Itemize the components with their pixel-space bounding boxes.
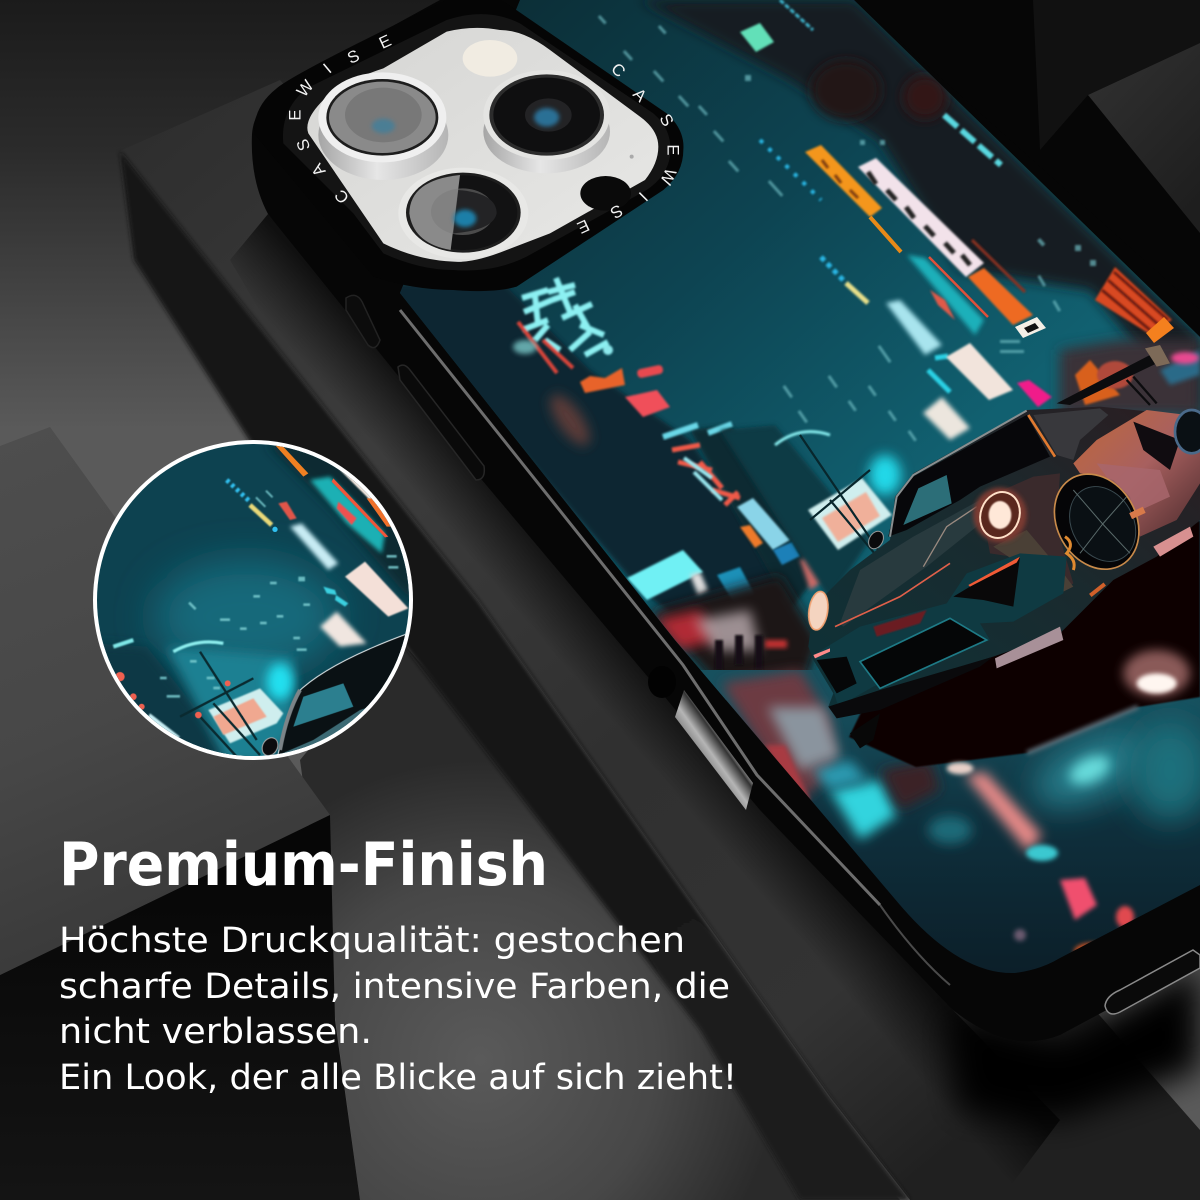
wet road left	[722, 670, 835, 797]
pink-white streak	[965, 772, 1042, 852]
body text: Ein Look, der alle Blicke auf sich zieht!	[59, 1058, 737, 1098]
body text: Höchste Druckqualität: gestochen	[59, 921, 685, 961]
blue signs	[737, 498, 790, 550]
road teal glows	[1024, 719, 1156, 821]
tiny window lights	[160, 490, 398, 698]
orange neon crown sign	[580, 368, 625, 393]
mid towers	[720, 425, 870, 600]
road shadow	[849, 520, 1200, 767]
side window	[1033, 408, 1108, 460]
frame highlights	[400, 310, 880, 905]
lens 2	[483, 70, 610, 173]
teal sign with red line	[907, 255, 984, 335]
car roof	[277, 633, 413, 763]
dark left tower	[400, 285, 774, 611]
pink sign	[1017, 380, 1052, 407]
CASEWISE ring text: S	[656, 111, 678, 130]
CASEWISE ring text: C	[331, 186, 353, 207]
left neon kanji	[513, 278, 613, 373]
CASEWISE ring text: A	[629, 84, 651, 106]
back right block top	[1088, 43, 1200, 233]
cyan neon	[173, 642, 223, 652]
red square sign	[625, 390, 670, 417]
phone artwork: neon street	[380, 0, 1200, 990]
camera island	[254, 0, 683, 291]
glass plate	[307, 28, 658, 262]
lens 1	[318, 72, 448, 180]
CASEWISE ring text: S	[293, 136, 314, 153]
CASEWISE ring text: S	[344, 46, 362, 68]
CASEWISE ring text: W	[293, 76, 318, 101]
headlight reflection on road	[1123, 650, 1190, 697]
lidar hole	[580, 176, 631, 211]
CASEWISE ring text: W	[656, 165, 680, 188]
flash	[463, 40, 517, 77]
glow field	[153, 560, 340, 673]
reflected strip	[1027, 707, 1138, 753]
phone case body	[252, 0, 1200, 1041]
shop	[208, 688, 283, 743]
red neon column	[663, 424, 732, 437]
floor light	[300, 640, 900, 1200]
street poles and neon	[775, 432, 830, 445]
blurred window lights	[598, 15, 1096, 442]
back right dark block	[854, 0, 1200, 345]
left headlight	[806, 590, 830, 631]
top signs	[310, 477, 385, 553]
lens 3	[398, 168, 528, 259]
hood	[840, 500, 980, 627]
low block front face	[0, 815, 360, 1200]
car body	[808, 407, 1200, 717]
case shadow lower right	[950, 965, 1200, 1120]
cyan dotted strips	[760, 140, 821, 200]
orange strip	[275, 445, 308, 477]
orange sign 2 and white box	[968, 268, 1033, 325]
orange sign	[805, 145, 882, 217]
blue dots strip	[227, 480, 250, 502]
tall block left face	[120, 151, 910, 1200]
low block top face	[0, 427, 330, 975]
front splitter	[995, 627, 1063, 668]
green sign	[740, 23, 774, 52]
phone shadow on block	[230, 214, 1060, 1200]
windshield	[888, 415, 1050, 537]
orange logo decal	[1065, 537, 1074, 570]
lower road reflection	[700, 670, 1200, 990]
crowd	[649, 572, 819, 670]
big white signs	[946, 343, 1013, 400]
zoom detail circle	[90, 440, 420, 770]
bottom port	[1105, 950, 1200, 1014]
front wheel	[1038, 459, 1156, 585]
body text: nicht verblassen.	[59, 1012, 372, 1052]
silver camera control	[675, 690, 753, 810]
CASEWISE ring text: I	[635, 188, 652, 205]
CASEWISE ring text: E	[286, 109, 305, 121]
mirror	[866, 529, 886, 551]
CASEWISE ring text: E	[376, 31, 394, 53]
pink road squares	[1060, 878, 1097, 920]
CASEWISE ring text: E	[574, 216, 592, 237]
CASEWISE ring text: I	[320, 60, 335, 77]
spoiler	[1057, 355, 1157, 405]
heading: Premium-Finish	[59, 830, 548, 900]
CASEWISE ring text: A	[307, 159, 329, 180]
shop window	[808, 478, 892, 550]
white sign	[858, 158, 984, 277]
body text	[59, 921, 737, 1098]
CASEWISE ring text	[286, 31, 683, 237]
sports car	[806, 345, 1200, 774]
CASEWISE ring text: E	[664, 144, 683, 156]
volume and side buttons	[346, 295, 676, 698]
main headlight	[973, 486, 1027, 544]
rear plate	[1153, 527, 1193, 557]
dark upper-right sky	[640, 0, 1200, 420]
small pink sign	[636, 364, 664, 379]
front side fender	[980, 473, 1073, 597]
text band	[283, 14, 670, 271]
body text: scharfe Details, intensive Farben, die	[59, 967, 730, 1007]
CASEWISE ring text: C	[607, 59, 629, 81]
black frame	[254, 0, 683, 291]
front bumper	[813, 553, 1067, 707]
white-blue sign	[886, 300, 942, 355]
CASEWISE ring text: S	[607, 201, 626, 223]
right orange shop	[1060, 340, 1200, 415]
rear rose body	[1073, 410, 1200, 537]
